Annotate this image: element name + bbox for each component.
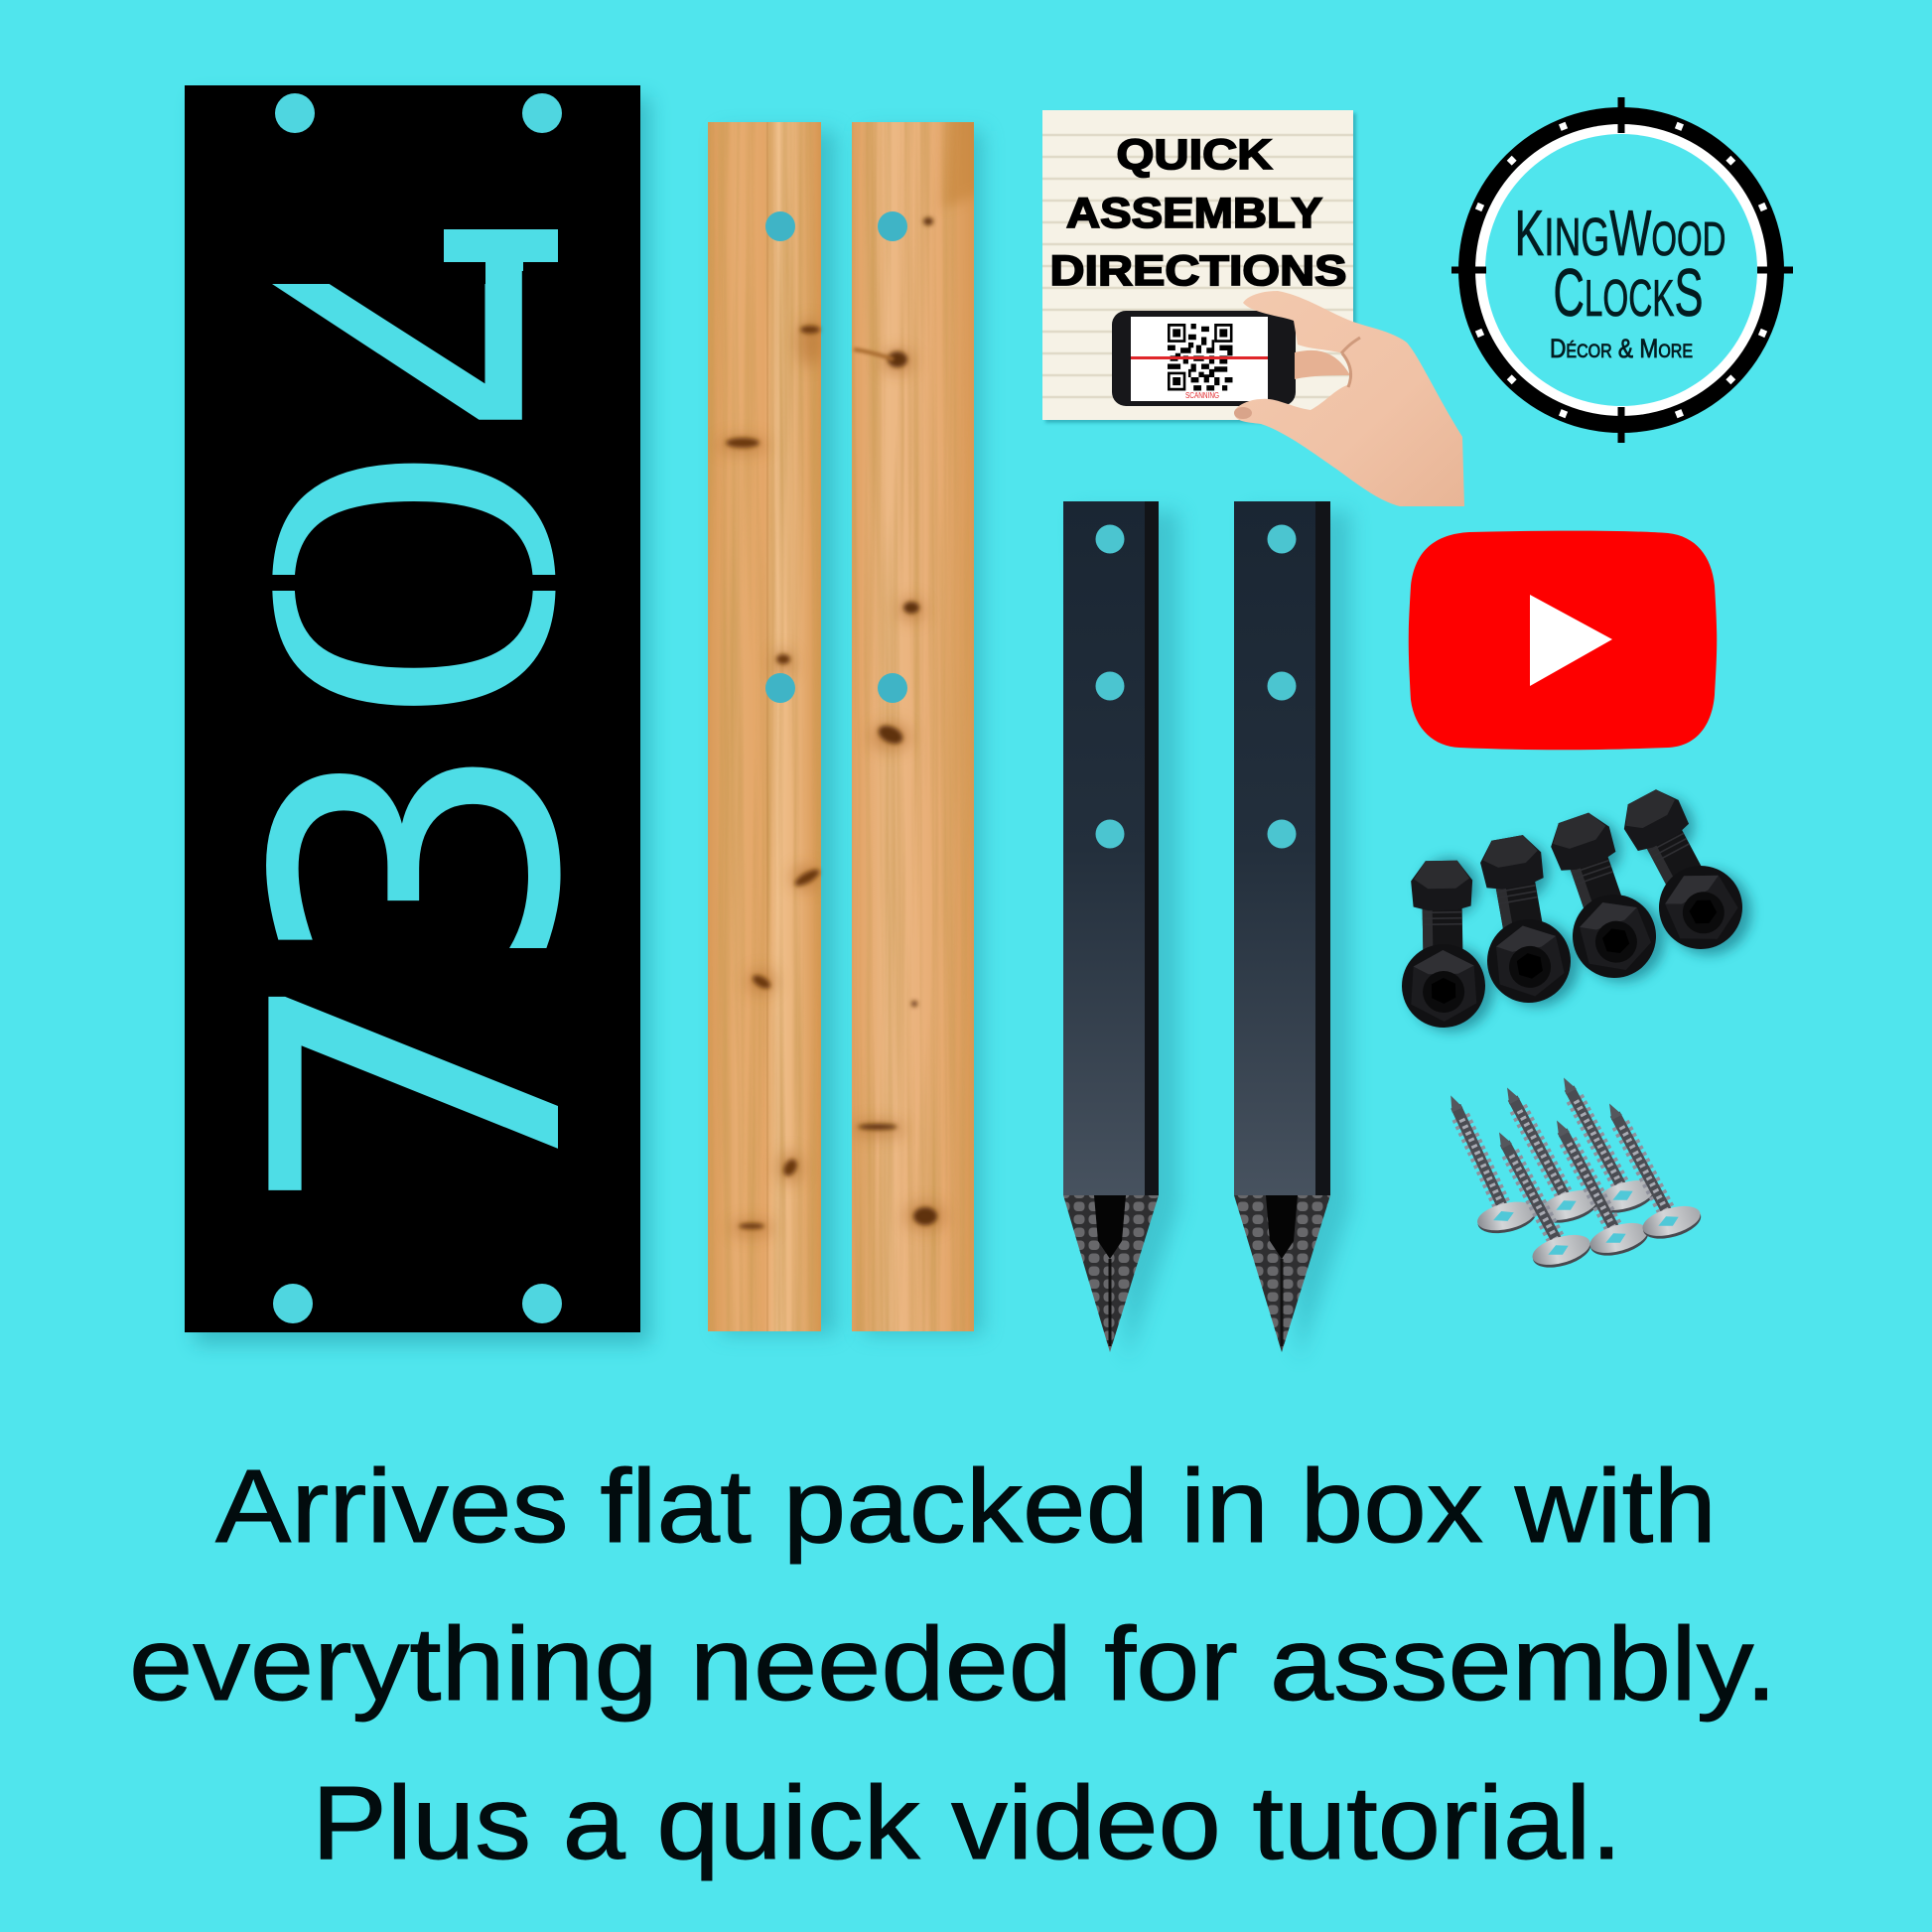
- card heading: QUICK: [1116, 131, 1273, 179]
- knots: [858, 217, 937, 1225]
- middle finger: [1295, 350, 1350, 379]
- hand holding phone: [1112, 291, 1464, 506]
- metal stake 1: [1063, 501, 1179, 1362]
- bolt shadows: [1409, 796, 1751, 1032]
- stake holes: [1267, 524, 1297, 848]
- metal stake 2: [1234, 501, 1351, 1362]
- panel: black address number sign: [182, 85, 707, 1344]
- plank holes: [765, 211, 795, 703]
- mounting holes: [273, 93, 562, 1323]
- knot halos: [850, 349, 945, 1230]
- phone: [1112, 311, 1296, 406]
- bolts and nuts: [1400, 777, 1757, 1032]
- scan line: [1131, 356, 1268, 359]
- stencil bridges: [253, 169, 613, 591]
- caption: Plus a quick video tutorial.: [312, 1765, 1622, 1881]
- house number 7304: 4: [182, 155, 707, 442]
- card: quick assembly directions: [1042, 110, 1356, 423]
- QR code: [1168, 324, 1233, 391]
- wood plank 1: [708, 122, 836, 1334]
- logo ring: [1458, 107, 1784, 433]
- logo wordmark: KINGWOOD: [1515, 197, 1725, 269]
- clock ticks: [1451, 97, 1793, 443]
- logo wordmark: Décor & More: [1550, 334, 1693, 363]
- house number 7304: [182, 155, 707, 1224]
- caption: [129, 1449, 1777, 1881]
- hand: [1234, 291, 1464, 506]
- clock markers: [1475, 122, 1767, 418]
- knot halos: [717, 319, 822, 1236]
- spike tip: [1234, 1195, 1330, 1352]
- logo wordmark: [1515, 197, 1725, 363]
- icon: video play button: [1409, 531, 1717, 750]
- logo wordmark: CLOCKS: [1553, 255, 1704, 331]
- plank holes: [878, 211, 907, 703]
- scanning label: SCANNING: [1185, 391, 1219, 400]
- card heading: [1050, 131, 1346, 295]
- card heading: ASSEMBLY: [1066, 190, 1322, 237]
- logo: KingWood Clocks: [1451, 97, 1793, 443]
- caption: Arrives flat packed in box with: [215, 1449, 1717, 1565]
- wood plank 2: [850, 109, 988, 1334]
- screws: [1421, 1063, 1710, 1285]
- house number 7304: 0: [184, 438, 642, 731]
- house number 7304: 7: [190, 961, 652, 1224]
- stake holes: [1096, 524, 1124, 848]
- house number 7304: 3: [196, 737, 647, 977]
- caption: everything needed for assembly.: [129, 1606, 1777, 1723]
- spike tip: [1063, 1195, 1159, 1352]
- card heading: DIRECTIONS: [1050, 247, 1346, 295]
- knots: [726, 326, 822, 1229]
